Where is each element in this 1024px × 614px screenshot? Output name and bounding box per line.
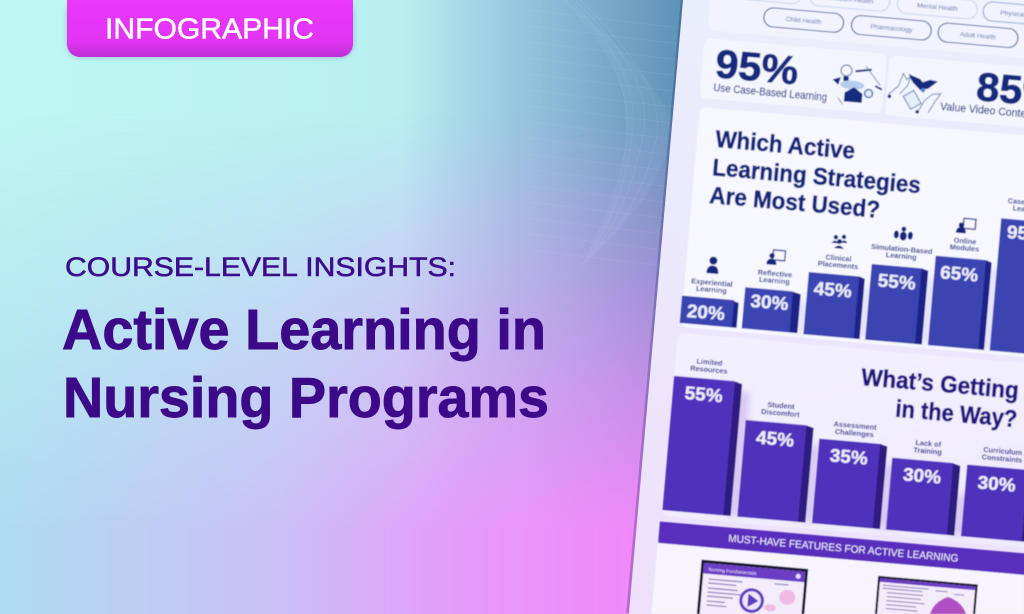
bar: student discomfort 45%: 45% bbox=[755, 427, 795, 451]
panel: course topics pills: Adult Health bbox=[960, 31, 996, 41]
background pink gradient overlay bbox=[0, 137, 670, 614]
laptop: anatomy lesson bbox=[875, 576, 978, 614]
main heading: Active Learning in bbox=[62, 298, 546, 362]
bar: simulation-based learning 55%: 55% bbox=[877, 271, 916, 294]
bar shadows bbox=[728, 391, 973, 535]
heading: which active learning strategies: Are Most Used? bbox=[708, 182, 881, 224]
barrier labels: Training bbox=[913, 445, 942, 457]
bar: assessment challenges 35% bbox=[812, 439, 888, 529]
infographic badge bbox=[67, 0, 353, 57]
strategy labels: Clinical bbox=[825, 253, 852, 264]
strategy labels: Experiential bbox=[691, 276, 733, 289]
bar: simulation-based learning 55% bbox=[865, 264, 928, 345]
tilted infographic sheet bbox=[662, 0, 1024, 559]
panel: 95% stat: 95% bbox=[714, 42, 800, 93]
panel: 95% stat bbox=[700, 38, 887, 114]
main heading: Nursing Programs bbox=[63, 366, 549, 430]
bar: case-based learning 95% bbox=[990, 218, 1024, 356]
bar: online modules 65% bbox=[928, 256, 992, 350]
barrier labels: Curriculum bbox=[983, 445, 1023, 457]
panel: must-have features bbox=[651, 521, 1024, 614]
bar: reflective learning 30%: 30% bbox=[750, 291, 789, 314]
bar: limited resources 55%: 55% bbox=[684, 383, 723, 407]
bar: clinical placements 45%: 45% bbox=[813, 278, 853, 302]
strategy labels: Modules bbox=[949, 242, 980, 254]
strategy labels: Learning bbox=[759, 275, 790, 286]
panel: barriers bbox=[662, 333, 1024, 559]
main heading bbox=[62, 298, 549, 430]
barrier labels: Limited bbox=[696, 357, 723, 368]
bar: experiential learning 20%: 20% bbox=[686, 301, 726, 324]
bar chart: barriers bbox=[662, 376, 1024, 542]
laptop: video lesson bbox=[697, 560, 808, 614]
bar: assessment challenges 35%: 35% bbox=[829, 446, 869, 469]
decorative mesh wave bbox=[565, 0, 672, 265]
bar: limited resources 55% bbox=[662, 376, 742, 516]
decorative horizontal mesh lines bbox=[530, 10, 680, 268]
bar: reflective learning 30% bbox=[742, 287, 801, 333]
panel: 95% stat: Use Case-Based Learning bbox=[713, 82, 828, 104]
barrier labels: Discomfort bbox=[761, 407, 800, 419]
panel: course topics pills: Child Health bbox=[785, 16, 822, 26]
panel: course topics pills: Mental Health bbox=[917, 2, 958, 13]
icon: play button bbox=[740, 589, 763, 612]
bar: student discomfort 45% bbox=[737, 420, 814, 523]
panel: course topics pills bbox=[707, 0, 1024, 72]
barrier labels: Lack of bbox=[915, 438, 942, 449]
sheet background bbox=[629, 0, 1024, 614]
infographic badge: INFOGRAPHIC bbox=[105, 14, 314, 46]
heading: what's getting in the way bbox=[858, 364, 1021, 433]
bar: online modules 65%: 65% bbox=[939, 262, 979, 286]
icon: online module screen bbox=[956, 218, 976, 234]
banner: must-have features: MUST-HAVE FEATURES FOR ACTIVE LEARNING bbox=[728, 533, 959, 565]
subtitle: COURSE-LEVEL INSIGHTS: bbox=[65, 252, 456, 282]
strategy labels: Online bbox=[953, 235, 977, 246]
strategy labels: Placements bbox=[817, 259, 859, 271]
icon: person bbox=[706, 256, 720, 274]
bar: curriculum constraints 30% bbox=[961, 465, 1024, 542]
barrier labels: Assessment bbox=[833, 419, 877, 432]
bar: lack of training 30%: 30% bbox=[902, 465, 942, 488]
bar: lack of training 30% bbox=[886, 458, 961, 536]
heading: which active learning strategies: Which Active bbox=[714, 126, 856, 165]
bar: experiential learning 20% bbox=[680, 296, 739, 328]
bar chart: strategies bbox=[680, 191, 1024, 356]
strategy labels: Learning bbox=[696, 284, 727, 295]
barrier labels bbox=[684, 356, 1024, 465]
barrier labels: Constraints bbox=[981, 452, 1023, 465]
icon: lightbulb and books bbox=[831, 63, 884, 108]
barrier labels: Student bbox=[767, 400, 795, 412]
heading: which active learning strategies bbox=[708, 126, 924, 227]
icon: simulation team bbox=[893, 226, 914, 241]
barrier labels: Resources bbox=[690, 364, 728, 376]
strategy labels: Reflective bbox=[757, 268, 793, 280]
banner: must-have features bbox=[658, 521, 1024, 586]
strategy icons bbox=[706, 196, 976, 296]
panel: course topics pills: Pharmacology bbox=[870, 23, 913, 34]
bar: clinical placements 45% bbox=[803, 272, 865, 339]
icon: lungs diagram bbox=[930, 597, 966, 614]
barrier labels: Challenges bbox=[835, 427, 874, 439]
strategy labels: Learning bbox=[885, 250, 917, 262]
bar shadows bbox=[797, 252, 997, 350]
icon: presenter at screen bbox=[766, 249, 786, 266]
sheet edge shadow bbox=[628, 0, 682, 613]
strategy labels bbox=[690, 169, 1024, 323]
strategy labels: Simulation-Based bbox=[871, 242, 933, 256]
laptop: video lesson: Nursing Fundamentals bbox=[708, 567, 757, 577]
panel: active learning strategies bbox=[679, 107, 1024, 369]
heading: which active learning strategies: Learning Strategies bbox=[711, 154, 922, 199]
panel: 85% stat bbox=[885, 55, 1024, 132]
icon: clinical group bbox=[831, 234, 848, 249]
icon: hands, graduation cap and tablet bbox=[886, 72, 942, 116]
bar: curriculum constraints 30%: 30% bbox=[977, 472, 1016, 496]
